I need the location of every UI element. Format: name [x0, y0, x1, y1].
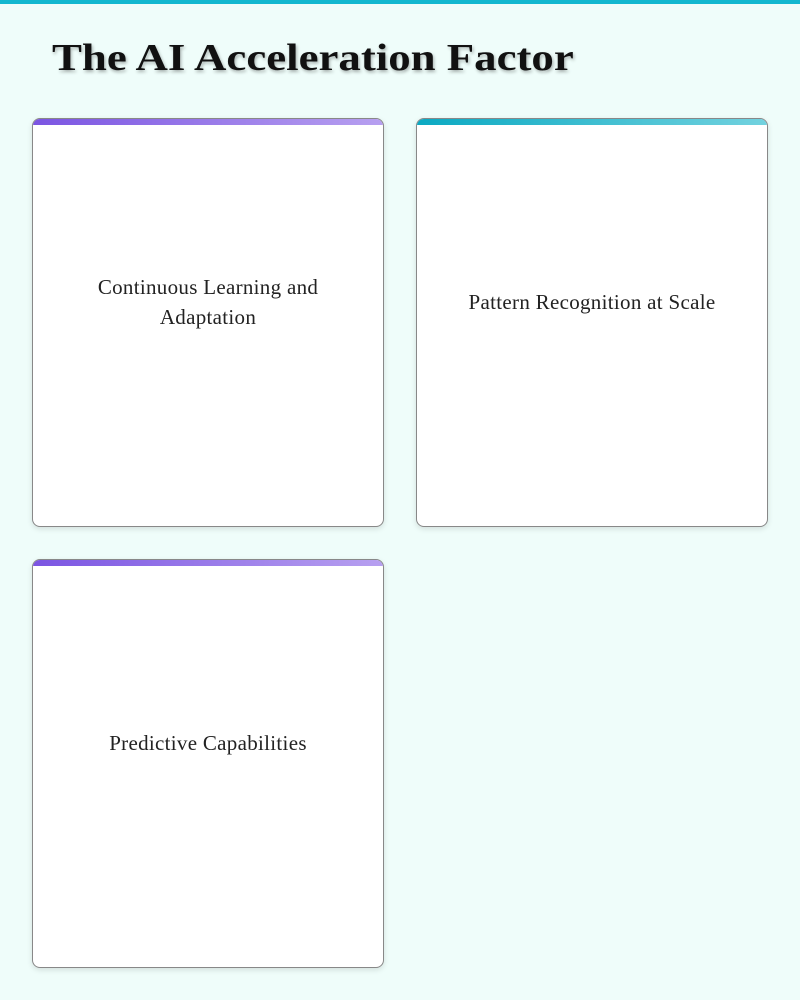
- text: pattern recognition: Pattern Recognition at Scale: [469, 290, 715, 314]
- panel: predictive capabilities: [32, 559, 384, 968]
- title: The AI Acceleration Factor: [52, 37, 574, 79]
- text: continuous learning: Continuous Learning and Adaptation: [98, 274, 318, 328]
- text: predictive capabilities: Predictive Capabilities: [109, 730, 307, 754]
- panel: continuous learning: [32, 118, 384, 527]
- panel: pattern recognition: [416, 118, 768, 527]
